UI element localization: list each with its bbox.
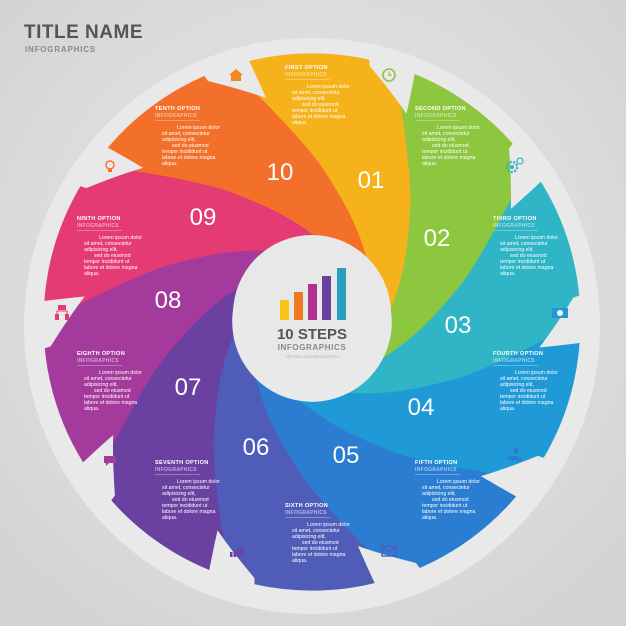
petal 08 <box>26 232 326 484</box>
text block: tenth option: labore et dolore magna <box>162 155 215 161</box>
icon: hand coin <box>508 448 522 461</box>
icon: clock <box>383 69 395 81</box>
text block: seventh option: adipisicing elit, <box>162 491 196 497</box>
text block: seventh option <box>155 460 220 521</box>
text block: sixth option: adipisicing elit, <box>292 534 326 540</box>
text block: fifth option: tempor incididunt ut <box>422 503 468 509</box>
text block: second option: INFOGRAPHICS <box>415 113 457 119</box>
text block: ninth option: labore et dolore magna <box>84 265 137 271</box>
text block: third option <box>493 216 558 277</box>
text block: first option: INFOGRAPHICS <box>285 72 327 78</box>
text block: eighth option: sit amet, consectetur <box>84 376 132 382</box>
numbers: 02 <box>424 225 450 252</box>
numbers: 07 <box>175 374 201 401</box>
text block: first option: labore et dolore magna <box>292 114 345 120</box>
text block: eighth option: Lorem ipsum dolor <box>99 370 142 376</box>
center circle: VECTOR ILLUSTRATION EPS 10 <box>285 355 339 359</box>
icon: bulb <box>106 161 114 172</box>
text block: first option: aliqua. <box>292 120 307 126</box>
icon: house <box>229 69 243 81</box>
title <box>24 22 143 54</box>
title: INFOGRAPHICS <box>25 45 96 54</box>
text block: fifth option: aliqua. <box>422 515 437 521</box>
text block: second option: tempor incididunt ut <box>422 149 468 155</box>
text block: tenth option: Lorem ipsum dolor <box>177 125 220 131</box>
numbers: 08 <box>155 287 181 314</box>
text block: third option: adipisicing elit, <box>500 247 534 253</box>
text block: sixth option: INFOGRAPHICS <box>285 510 327 516</box>
text block: third option: THIRD OPTION <box>493 216 537 222</box>
text block: sixth option: sed do eiusmod <box>302 540 339 546</box>
text block: tenth option: tempor incididunt ut <box>162 149 208 155</box>
text block: second option: sit amet, consectetur <box>422 131 470 137</box>
petal 05 <box>239 283 537 597</box>
text block: seventh option: Lorem ipsum dolor <box>177 479 220 485</box>
text block: eighth option <box>77 351 142 412</box>
numbers: 01 <box>358 167 384 194</box>
text block: second option <box>415 106 480 167</box>
text block: ninth option <box>77 216 142 277</box>
text block: sixth option: Lorem ipsum dolor <box>307 522 350 528</box>
text block: fifth option: sed do eiusmod <box>432 497 469 503</box>
text block: third option: tempor incididunt ut <box>500 259 546 265</box>
numbers: 10 <box>267 159 293 186</box>
text block: second option: Lorem ipsum dolor <box>437 125 480 131</box>
text block: third option: INFOGRAPHICS <box>493 223 535 229</box>
text block: third option: sed do eiusmod <box>510 253 547 259</box>
text block: fifth option: INFOGRAPHICS <box>415 467 457 473</box>
text block: seventh option: SEVENTH OPTION <box>155 460 209 466</box>
text block: ninth option: INFOGRAPHICS <box>77 223 119 229</box>
text block: fourth option: sed do eiusmod <box>510 388 547 394</box>
text block: ninth option: sed do eiusmod <box>94 253 131 259</box>
text block: fourth option <box>493 351 558 412</box>
text block: fourth option: FOURTH OPTION <box>493 351 543 357</box>
text block: fourth option: Lorem ipsum dolor <box>515 370 558 376</box>
text block: sixth option: tempor incididunt ut <box>292 546 338 552</box>
text block: seventh option: tempor incididunt ut <box>162 503 208 509</box>
text block: second option: SECOND OPTION <box>415 106 466 112</box>
center circle: 10 STEPS <box>277 326 347 343</box>
text block: eighth option: aliqua. <box>84 406 99 412</box>
text block: ninth option: tempor incididunt ut <box>84 259 130 265</box>
petal 02 <box>252 56 550 370</box>
text block: eighth option: tempor incididunt ut <box>84 394 130 400</box>
petal 10 <box>87 47 385 361</box>
numbers: 04 <box>408 394 434 421</box>
icon: org chart <box>55 305 69 320</box>
text block: first option: FIRST OPTION <box>285 65 328 71</box>
icon: mail <box>382 546 396 556</box>
text block: ninth option: adipisicing elit, <box>84 247 118 253</box>
icon: bar chart <box>280 268 346 320</box>
icon: chat <box>104 456 116 466</box>
text block: seventh option: aliqua. <box>162 515 177 521</box>
text block: first option: adipisicing elit, <box>292 96 326 102</box>
text block: fourth option: labore et dolore magna <box>500 400 553 406</box>
text block: seventh option: INFOGRAPHICS <box>155 467 197 473</box>
text block: first option <box>285 65 350 126</box>
text block: ninth option: sit amet, consectetur <box>84 241 132 247</box>
text block: fourth option: sit amet, consectetur <box>500 376 548 382</box>
text block: second option: adipisicing elit, <box>422 137 456 143</box>
text block: tenth option: aliqua. <box>162 161 177 167</box>
numbers: 06 <box>243 434 269 461</box>
text block: seventh option: sit amet, consectetur <box>162 485 210 491</box>
petal 07 <box>74 274 372 588</box>
text block: fourth option: INFOGRAPHICS <box>493 358 535 364</box>
center circle: INFOGRAPHICS <box>278 343 346 352</box>
numbers <box>155 159 471 469</box>
petal 09 <box>31 145 331 397</box>
text block: fifth option: labore et dolore magna <box>422 509 475 515</box>
text block: first option: tempor incididunt ut <box>292 108 338 114</box>
text block: third option: Lorem ipsum dolor <box>515 235 558 241</box>
text block: tenth option <box>155 106 220 167</box>
center circle <box>233 235 391 393</box>
icon: gear <box>507 158 523 172</box>
text block: eighth option: INFOGRAPHICS <box>77 358 119 364</box>
numbers: 05 <box>333 442 359 469</box>
icon: chart <box>230 546 243 557</box>
text block: sixth option: SIXTH OPTION <box>285 503 328 509</box>
numbers: 03 <box>445 312 471 339</box>
text block: sixth option: aliqua. <box>292 558 307 564</box>
petal 03 <box>298 160 598 412</box>
text block: fifth option: FIFTH OPTION <box>415 460 457 466</box>
text block: fourth option: tempor incididunt ut <box>500 394 546 400</box>
text block: sixth option <box>285 503 350 564</box>
text block: first option: sed do eiusmod <box>302 102 339 108</box>
text block: tenth option: INFOGRAPHICS <box>155 113 197 119</box>
text block: fourth option: adipisicing elit, <box>500 382 534 388</box>
petal 04 <box>293 247 593 499</box>
text block: ninth option: Lorem ipsum dolor <box>99 235 142 241</box>
petal 06 <box>213 334 395 590</box>
text block: fourth option: aliqua. <box>500 406 515 412</box>
text block: fifth option <box>415 460 480 521</box>
numbers: 09 <box>190 204 216 231</box>
text block: seventh option: labore et dolore magna <box>162 509 215 515</box>
text block: eighth option: adipisicing elit, <box>84 382 118 388</box>
petal 01 <box>229 54 411 310</box>
text block: fifth option: sit amet, consectetur <box>422 485 470 491</box>
text block: eighth option: sed do eiusmod <box>94 388 131 394</box>
text block: fifth option: adipisicing elit, <box>422 491 456 497</box>
text block: tenth option: sit amet, consectetur <box>162 131 210 137</box>
text block: eighth option: labore et dolore magna <box>84 400 137 406</box>
text block: third option: labore et dolore magna <box>500 265 553 271</box>
text block: fifth option: Lorem ipsum dolor <box>437 479 480 485</box>
text block: second option: sed do eiusmod <box>432 143 469 149</box>
text block: first option: Lorem ipsum dolor <box>307 84 350 90</box>
text block: ninth option: NINTH OPTION <box>77 216 121 222</box>
text block: second option: aliqua. <box>422 161 437 167</box>
text block: first option: sit amet, consectetur <box>292 90 340 96</box>
text block: third option: aliqua. <box>500 271 515 277</box>
icon: money <box>552 308 568 318</box>
text block: tenth option: sed do eiusmod <box>172 143 209 149</box>
text block: sixth option: sit amet, consectetur <box>292 528 340 534</box>
text block: third option: sit amet, consectetur <box>500 241 548 247</box>
text block: tenth option: TENTH OPTION <box>155 106 200 112</box>
text block: sixth option: labore et dolore magna <box>292 552 345 558</box>
text block: seventh option: sed do eiusmod <box>172 497 209 503</box>
text block: eighth option: EIGHTH OPTION <box>77 351 125 357</box>
text block: second option: labore et dolore magna <box>422 155 475 161</box>
title: TITLE NAME <box>24 22 143 43</box>
text block: tenth option: adipisicing elit, <box>162 137 196 143</box>
text block: ninth option: aliqua. <box>84 271 99 277</box>
